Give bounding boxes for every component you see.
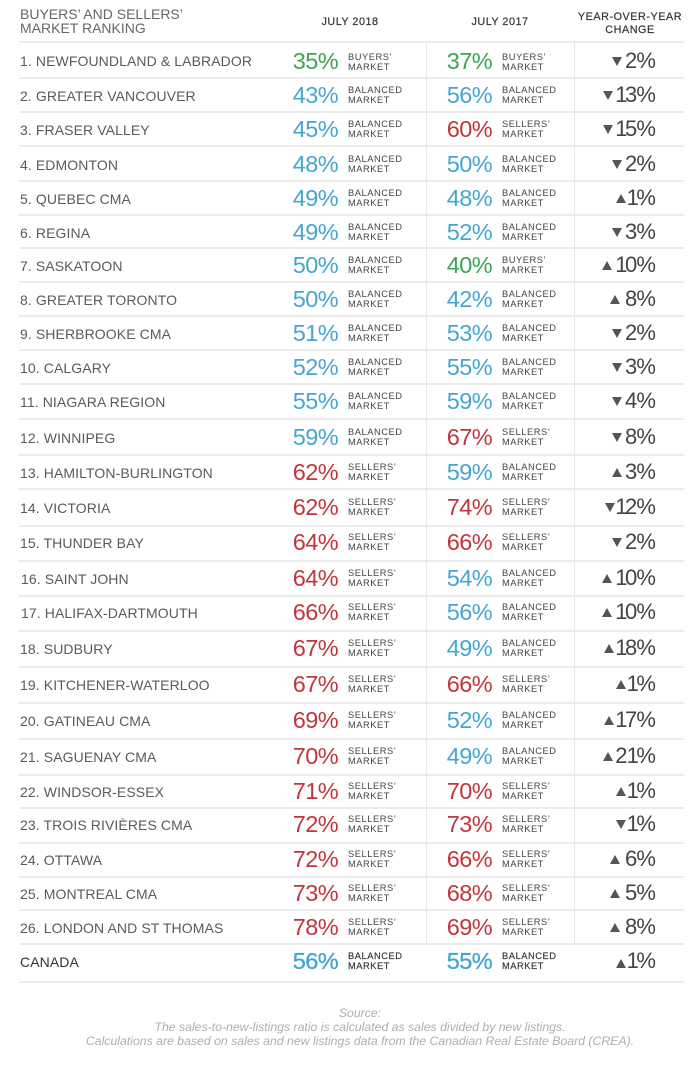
row 18: Sudbury: 18. SUDBURY bbox=[20, 641, 113, 657]
row 7: Saskatoon: 10% bbox=[615, 252, 655, 277]
row 9: Sherbrooke CMA: 9. SHERBROOKE CMA bbox=[20, 326, 171, 342]
row 19: Kitchener-Waterloo: MARKET bbox=[348, 684, 390, 694]
row 22: Windsor-Essex: MARKET bbox=[348, 791, 390, 801]
row 23: Trois Rivières CMA bbox=[20, 811, 656, 837]
row 21: Saguenay CMA: MARKET bbox=[502, 756, 544, 766]
row 14: Victoria: 14. VICTORIA bbox=[20, 500, 110, 516]
row 8: Greater Toronto: BALANCED bbox=[502, 289, 557, 299]
row 16: Saint John: 64% bbox=[293, 565, 338, 591]
row 6: Regina: MARKET bbox=[348, 232, 390, 242]
row 17: Halifax-Dartmouth: 10% bbox=[615, 599, 655, 624]
row: Canada total: BALANCED bbox=[348, 951, 403, 961]
row 9: Sherbrooke CMA: MARKET bbox=[348, 333, 390, 343]
row 11: Niagara Region: 59% bbox=[447, 388, 492, 414]
row 26: London and St Thomas: SELLERS’ bbox=[502, 917, 550, 927]
row 2: Greater Vancouver: MARKET bbox=[502, 95, 544, 105]
row 23: Trois Rivières CMA: MARKET bbox=[348, 824, 390, 834]
row 17: Halifax-Dartmouth: 56% bbox=[447, 599, 492, 625]
row 8: Greater Toronto: 42% bbox=[447, 286, 492, 312]
row 19: Kitchener-Waterloo: 19. KITCHENER-WATERLOO bbox=[20, 677, 210, 693]
row 20: Gatineau CMA: 69% bbox=[293, 707, 338, 733]
row 24: Ottawa: 6% bbox=[625, 846, 655, 871]
row 13: Hamilton-Burlington: SELLERS’ bbox=[348, 462, 396, 472]
row 15: Thunder Bay bbox=[20, 529, 656, 555]
row 15: Thunder Bay: 66% bbox=[447, 529, 492, 555]
row 12: Winnipeg: BALANCED bbox=[348, 427, 403, 437]
row 6: Regina: 52% bbox=[447, 219, 492, 245]
row 7: Saskatoon: 7. SASKATOON bbox=[20, 258, 123, 274]
row 4: Edmonton: 48% bbox=[293, 151, 338, 177]
row 11: Niagara Region: BALANCED bbox=[502, 391, 557, 401]
row 7: Saskatoon: 50% bbox=[293, 252, 338, 278]
row 10: Calgary: MARKET bbox=[348, 367, 390, 377]
row 21: Saguenay CMA: MARKET bbox=[348, 756, 390, 766]
row 22: Windsor-Essex: MARKET bbox=[502, 791, 544, 801]
row 1: Newfoundland & Labrador: 37% bbox=[447, 48, 492, 74]
row 6: Regina: BALANCED bbox=[348, 222, 403, 232]
row 5: Quebec CMA: 48% bbox=[447, 185, 492, 211]
row 1: Newfoundland & Labrador bbox=[20, 48, 656, 74]
row 21: Saguenay CMA: SELLERS’ bbox=[348, 746, 396, 756]
row 4: Edmonton bbox=[20, 151, 656, 177]
row 7: Saskatoon: 40% bbox=[447, 252, 492, 278]
row 14: Victoria: MARKET bbox=[348, 507, 390, 517]
row 17: Halifax-Dartmouth: SELLERS’ bbox=[348, 602, 396, 612]
row 16: Saint John: SELLERS’ bbox=[348, 568, 396, 578]
row 13: Hamilton-Burlington: 62% bbox=[293, 459, 338, 485]
row 25: Montreal CMA: 25. MONTREAL CMA bbox=[20, 886, 157, 902]
row 9: Sherbrooke CMA: MARKET bbox=[502, 333, 544, 343]
row 4: Edmonton: 50% bbox=[447, 151, 492, 177]
row 3: Fraser Valley bbox=[20, 116, 656, 142]
row 23: Trois Rivières CMA: MARKET bbox=[502, 824, 544, 834]
row 1: Newfoundland & Labrador: MARKET bbox=[502, 62, 544, 72]
row 6: Regina: 6. REGINA bbox=[20, 225, 90, 241]
row 14: Victoria bbox=[20, 494, 656, 520]
row 21: Saguenay CMA bbox=[20, 743, 656, 769]
row 13: Hamilton-Burlington: 13. HAMILTON-BURLINGTON bbox=[20, 465, 213, 481]
row 8: Greater Toronto bbox=[20, 286, 656, 312]
row 9: Sherbrooke CMA bbox=[20, 320, 656, 346]
row 14: Victoria: SELLERS’ bbox=[348, 497, 396, 507]
row 16: Saint John bbox=[21, 565, 656, 591]
row 3: Fraser Valley: MARKET bbox=[502, 129, 544, 139]
row 2: Greater Vancouver: 2. GREATER VANCOUVER bbox=[20, 88, 196, 104]
row 19: Kitchener-Waterloo: SELLERS’ bbox=[502, 674, 550, 684]
row 10: Calgary: 52% bbox=[293, 354, 338, 380]
row 10: Calgary: 55% bbox=[447, 354, 492, 380]
row 5: Quebec CMA: 1% bbox=[627, 185, 655, 210]
header: July 2018: JULY 2018 bbox=[322, 16, 378, 28]
row 26: London and St Thomas: 78% bbox=[293, 914, 338, 940]
row 12: Winnipeg: 59% bbox=[293, 424, 338, 450]
row 12: Winnipeg: MARKET bbox=[348, 437, 390, 447]
row 15: Thunder Bay: SELLERS’ bbox=[502, 532, 550, 542]
row 16: Saint John: 16. SAINT JOHN bbox=[21, 571, 129, 587]
row: Canada total: MARKET bbox=[502, 961, 544, 971]
header: table title: MARKET RANKING bbox=[20, 20, 146, 36]
row 14: Victoria: MARKET bbox=[502, 507, 544, 517]
row 20: Gatineau CMA: BALANCED bbox=[502, 710, 557, 720]
row 23: Trois Rivières CMA: 73% bbox=[447, 811, 492, 837]
row 22: Windsor-Essex: 71% bbox=[293, 778, 338, 804]
row 3: Fraser Valley: 15% bbox=[615, 116, 655, 141]
row 19: Kitchener-Waterloo: 66% bbox=[447, 671, 492, 697]
row 25: Montreal CMA: SELLERS’ bbox=[502, 883, 550, 893]
row 9: Sherbrooke CMA: 53% bbox=[447, 320, 492, 346]
row 23: Trois Rivières CMA: 23. TROIS RIVIÈRES CMA bbox=[20, 817, 192, 833]
row 23: Trois Rivières CMA: SELLERS’ bbox=[502, 814, 550, 824]
source note: Calculations are based on sales and new listings data from the Canadian Real Estate Board (CREA). bbox=[86, 1034, 634, 1048]
header: year-over-year change: YEAR-OVER-YEAR bbox=[578, 11, 682, 23]
row 3: Fraser Valley: MARKET bbox=[348, 129, 390, 139]
row 5: Quebec CMA: BALANCED bbox=[502, 188, 557, 198]
row 1: Newfoundland & Labrador: 1. NEWFOUNDLAND & LABRADOR bbox=[20, 53, 252, 69]
row 14: Victoria: SELLERS’ bbox=[502, 497, 550, 507]
row 24: Ottawa bbox=[20, 846, 656, 872]
row 22: Windsor-Essex bbox=[20, 778, 656, 804]
row 21: Saguenay CMA: 21. SAGUENAY CMA bbox=[20, 749, 156, 765]
header: table title: BUYERS’ AND SELLERS’ bbox=[20, 6, 183, 22]
row 16: Saint John: 54% bbox=[447, 565, 492, 591]
row 1: Newfoundland & Labrador: 2% bbox=[625, 48, 655, 73]
row 4: Edmonton: MARKET bbox=[348, 164, 390, 174]
row 25: Montreal CMA bbox=[20, 880, 656, 906]
row 13: Hamilton-Burlington: 3% bbox=[625, 459, 655, 484]
row 10: Calgary: MARKET bbox=[502, 367, 544, 377]
row 20: Gatineau CMA: 20. GATINEAU CMA bbox=[20, 713, 150, 729]
row 14: Victoria: 12% bbox=[615, 494, 655, 519]
row 26: London and St Thomas: MARKET bbox=[502, 927, 544, 937]
row 9: Sherbrooke CMA: 51% bbox=[293, 320, 338, 346]
row 26: London and St Thomas bbox=[20, 914, 656, 940]
row 24: Ottawa: SELLERS’ bbox=[502, 849, 550, 859]
row 8: Greater Toronto: 8% bbox=[625, 286, 655, 311]
row: Canada total: 55% bbox=[447, 948, 492, 974]
row 26: London and St Thomas: 26. LONDON AND ST THOMAS bbox=[20, 920, 223, 936]
row 24: Ottawa: MARKET bbox=[348, 859, 390, 869]
row 5: Quebec CMA: MARKET bbox=[502, 198, 544, 208]
row 15: Thunder Bay: 15. THUNDER BAY bbox=[20, 535, 144, 551]
row 12: Winnipeg: SELLERS’ bbox=[502, 427, 550, 437]
row 17: Halifax-Dartmouth: 66% bbox=[293, 599, 338, 625]
row 15: Thunder Bay: 2% bbox=[625, 529, 655, 554]
row 26: London and St Thomas: 8% bbox=[625, 914, 655, 939]
row 23: Trois Rivières CMA: 1% bbox=[627, 811, 655, 836]
row 16: Saint John: MARKET bbox=[502, 578, 544, 588]
row 21: Saguenay CMA: 21% bbox=[615, 743, 655, 768]
row 17: Halifax-Dartmouth: MARKET bbox=[348, 612, 390, 622]
row 22: Windsor-Essex: 1% bbox=[627, 778, 655, 803]
row 8: Greater Toronto: MARKET bbox=[502, 299, 544, 309]
row 19: Kitchener-Waterloo: 1% bbox=[627, 671, 655, 696]
row 25: Montreal CMA: 5% bbox=[625, 880, 655, 905]
row 20: Gatineau CMA: MARKET bbox=[348, 720, 390, 730]
row 8: Greater Toronto: 50% bbox=[293, 286, 338, 312]
row 20: Gatineau CMA: 17% bbox=[615, 707, 655, 732]
row 22: Windsor-Essex: 70% bbox=[447, 778, 492, 804]
row 18: Sudbury: 18% bbox=[615, 635, 655, 660]
row 24: Ottawa: SELLERS’ bbox=[348, 849, 396, 859]
row 7: Saskatoon: MARKET bbox=[348, 265, 390, 275]
row 19: Kitchener-Waterloo: 67% bbox=[293, 671, 338, 697]
row 21: Saguenay CMA: 70% bbox=[293, 743, 338, 769]
row 5: Quebec CMA bbox=[20, 185, 656, 211]
row 11: Niagara Region: BALANCED bbox=[348, 391, 403, 401]
row: Canada total bbox=[20, 948, 656, 974]
row 2: Greater Vancouver bbox=[20, 82, 656, 108]
row 13: Hamilton-Burlington: 59% bbox=[447, 459, 492, 485]
row 20: Gatineau CMA: SELLERS’ bbox=[348, 710, 396, 720]
row 7: Saskatoon: MARKET bbox=[502, 265, 544, 275]
row 10: Calgary: BALANCED bbox=[348, 357, 403, 367]
row 7: Saskatoon: BALANCED bbox=[348, 255, 403, 265]
row 9: Sherbrooke CMA: BALANCED bbox=[348, 323, 403, 333]
row 17: Halifax-Dartmouth: BALANCED bbox=[502, 602, 557, 612]
row 26: London and St Thomas: SELLERS’ bbox=[348, 917, 396, 927]
header: table title bbox=[20, 6, 183, 36]
row 18: Sudbury: MARKET bbox=[348, 648, 390, 658]
source note bbox=[86, 1006, 634, 1048]
row 17: Halifax-Dartmouth: 17. HALIFAX-DARTMOUTH bbox=[21, 605, 198, 621]
row 18: Sudbury bbox=[20, 635, 656, 661]
row 11: Niagara Region: MARKET bbox=[502, 401, 544, 411]
row 18: Sudbury: SELLERS’ bbox=[348, 638, 396, 648]
row 1: Newfoundland & Labrador: 35% bbox=[293, 48, 338, 74]
row 2: Greater Vancouver: MARKET bbox=[348, 95, 390, 105]
row: Canada total: CANADA bbox=[20, 954, 79, 970]
row 12: Winnipeg: 12. WINNIPEG bbox=[20, 430, 115, 446]
row 15: Thunder Bay: MARKET bbox=[502, 542, 544, 552]
row 5: Quebec CMA: MARKET bbox=[348, 198, 390, 208]
row 22: Windsor-Essex: 22. WINDSOR-ESSEX bbox=[20, 784, 164, 800]
row 5: Quebec CMA: 5. QUEBEC CMA bbox=[20, 191, 131, 207]
header: year-over-year change bbox=[578, 11, 682, 36]
row 7: Saskatoon bbox=[20, 252, 656, 278]
row 20: Gatineau CMA bbox=[20, 707, 656, 733]
row 4: Edmonton: BALANCED bbox=[348, 154, 403, 164]
row: Canada total: 56% bbox=[293, 948, 338, 974]
row 18: Sudbury: BALANCED bbox=[502, 638, 557, 648]
row 2: Greater Vancouver: BALANCED bbox=[348, 85, 403, 95]
row 2: Greater Vancouver: BALANCED bbox=[502, 85, 557, 95]
row 25: Montreal CMA: 68% bbox=[447, 880, 492, 906]
row 25: Montreal CMA: MARKET bbox=[502, 893, 544, 903]
row 5: Quebec CMA: 49% bbox=[293, 185, 338, 211]
row 22: Windsor-Essex: SELLERS’ bbox=[502, 781, 550, 791]
row 25: Montreal CMA: MARKET bbox=[348, 893, 390, 903]
source note: Source: bbox=[339, 1006, 381, 1020]
row 13: Hamilton-Burlington: MARKET bbox=[502, 472, 544, 482]
row 1: Newfoundland & Labrador: BUYERS’ bbox=[348, 52, 392, 62]
row 5: Quebec CMA: BALANCED bbox=[348, 188, 403, 198]
row 2: Greater Vancouver: 13% bbox=[615, 82, 655, 107]
row 22: Windsor-Essex: SELLERS’ bbox=[348, 781, 396, 791]
row 11: Niagara Region: 55% bbox=[293, 388, 338, 414]
row: Canada total: 1% bbox=[627, 948, 655, 973]
row 10: Calgary: 10. CALGARY bbox=[20, 360, 111, 376]
row 11: Niagara Region bbox=[20, 388, 656, 414]
row 4: Edmonton: 2% bbox=[625, 151, 655, 176]
row 8: Greater Toronto: BALANCED bbox=[348, 289, 403, 299]
source note: The sales-to-new-listings ratio is calculated as sales divided by new listings. bbox=[154, 1020, 566, 1034]
row 8: Greater Toronto: 8. GREATER TORONTO bbox=[20, 292, 177, 308]
row 10: Calgary: BALANCED bbox=[502, 357, 557, 367]
row 26: London and St Thomas: MARKET bbox=[348, 927, 390, 937]
row 23: Trois Rivières CMA: 72% bbox=[293, 811, 338, 837]
row 17: Halifax-Dartmouth bbox=[21, 599, 656, 625]
row 12: Winnipeg bbox=[20, 424, 656, 450]
row 3: Fraser Valley: BALANCED bbox=[348, 119, 403, 129]
row 19: Kitchener-Waterloo: SELLERS’ bbox=[348, 674, 396, 684]
row 21: Saguenay CMA: BALANCED bbox=[502, 746, 557, 756]
row 23: Trois Rivières CMA: SELLERS’ bbox=[348, 814, 396, 824]
row 6: Regina bbox=[20, 219, 656, 245]
row 4: Edmonton: MARKET bbox=[502, 164, 544, 174]
row 6: Regina: 3% bbox=[625, 219, 655, 244]
row 15: Thunder Bay: MARKET bbox=[348, 542, 390, 552]
row 6: Regina: BALANCED bbox=[502, 222, 557, 232]
row 26: London and St Thomas: 69% bbox=[447, 914, 492, 940]
row 16: Saint John: MARKET bbox=[348, 578, 390, 588]
row 16: Saint John: BALANCED bbox=[502, 568, 557, 578]
row 7: Saskatoon: BUYERS’ bbox=[502, 255, 546, 265]
header: July 2017: JULY 2017 bbox=[472, 16, 528, 28]
row 18: Sudbury: MARKET bbox=[502, 648, 544, 658]
row 3: Fraser Valley: 3. FRASER VALLEY bbox=[20, 122, 150, 138]
row 24: Ottawa: 72% bbox=[293, 846, 338, 872]
row 6: Regina: 49% bbox=[293, 219, 338, 245]
row 15: Thunder Bay: SELLERS’ bbox=[348, 532, 396, 542]
row 11: Niagara Region: 11. NIAGARA REGION bbox=[20, 394, 165, 410]
row 16: Saint John: 10% bbox=[615, 565, 655, 590]
row 1: Newfoundland & Labrador: BUYERS’ bbox=[502, 52, 546, 62]
row 19: Kitchener-Waterloo bbox=[20, 671, 656, 697]
row 3: Fraser Valley: SELLERS’ bbox=[502, 119, 550, 129]
row 19: Kitchener-Waterloo: MARKET bbox=[502, 684, 544, 694]
row 21: Saguenay CMA: 49% bbox=[447, 743, 492, 769]
row 1: Newfoundland & Labrador: MARKET bbox=[348, 62, 390, 72]
row 20: Gatineau CMA: 52% bbox=[447, 707, 492, 733]
row 6: Regina: MARKET bbox=[502, 232, 544, 242]
row 2: Greater Vancouver: 43% bbox=[293, 82, 338, 108]
row 4: Edmonton: BALANCED bbox=[502, 154, 557, 164]
row 13: Hamilton-Burlington bbox=[20, 459, 656, 485]
row 11: Niagara Region: 4% bbox=[625, 388, 655, 413]
row 12: Winnipeg: 67% bbox=[447, 424, 492, 450]
row 12: Winnipeg: 8% bbox=[625, 424, 655, 449]
row 10: Calgary bbox=[20, 354, 656, 380]
row 4: Edmonton: 4. EDMONTON bbox=[20, 157, 118, 173]
row 8: Greater Toronto: MARKET bbox=[348, 299, 390, 309]
row 3: Fraser Valley: 60% bbox=[447, 116, 492, 142]
row 11: Niagara Region: MARKET bbox=[348, 401, 390, 411]
row: Canada total: BALANCED bbox=[502, 951, 557, 961]
header: year-over-year change: CHANGE bbox=[605, 24, 655, 36]
row 18: Sudbury: 67% bbox=[293, 635, 338, 661]
row 25: Montreal CMA: SELLERS’ bbox=[348, 883, 396, 893]
row 9: Sherbrooke CMA: 2% bbox=[625, 320, 655, 345]
row 2: Greater Vancouver: 56% bbox=[447, 82, 492, 108]
row 20: Gatineau CMA: MARKET bbox=[502, 720, 544, 730]
row 12: Winnipeg: MARKET bbox=[502, 437, 544, 447]
row 25: Montreal CMA: 73% bbox=[293, 880, 338, 906]
row 3: Fraser Valley: 45% bbox=[293, 116, 338, 142]
row 15: Thunder Bay: 64% bbox=[293, 529, 338, 555]
row 14: Victoria: 62% bbox=[293, 494, 338, 520]
row 24: Ottawa: 24. OTTAWA bbox=[20, 852, 102, 868]
row 13: Hamilton-Burlington: MARKET bbox=[348, 472, 390, 482]
row 9: Sherbrooke CMA: BALANCED bbox=[502, 323, 557, 333]
row 10: Calgary: 3% bbox=[625, 354, 655, 379]
row 18: Sudbury: 49% bbox=[447, 635, 492, 661]
row 13: Hamilton-Burlington: BALANCED bbox=[502, 462, 557, 472]
row 24: Ottawa: 66% bbox=[447, 846, 492, 872]
row 17: Halifax-Dartmouth: MARKET bbox=[502, 612, 544, 622]
row 14: Victoria: 74% bbox=[447, 494, 492, 520]
row: Canada total: MARKET bbox=[348, 961, 390, 971]
row 24: Ottawa: MARKET bbox=[502, 859, 544, 869]
